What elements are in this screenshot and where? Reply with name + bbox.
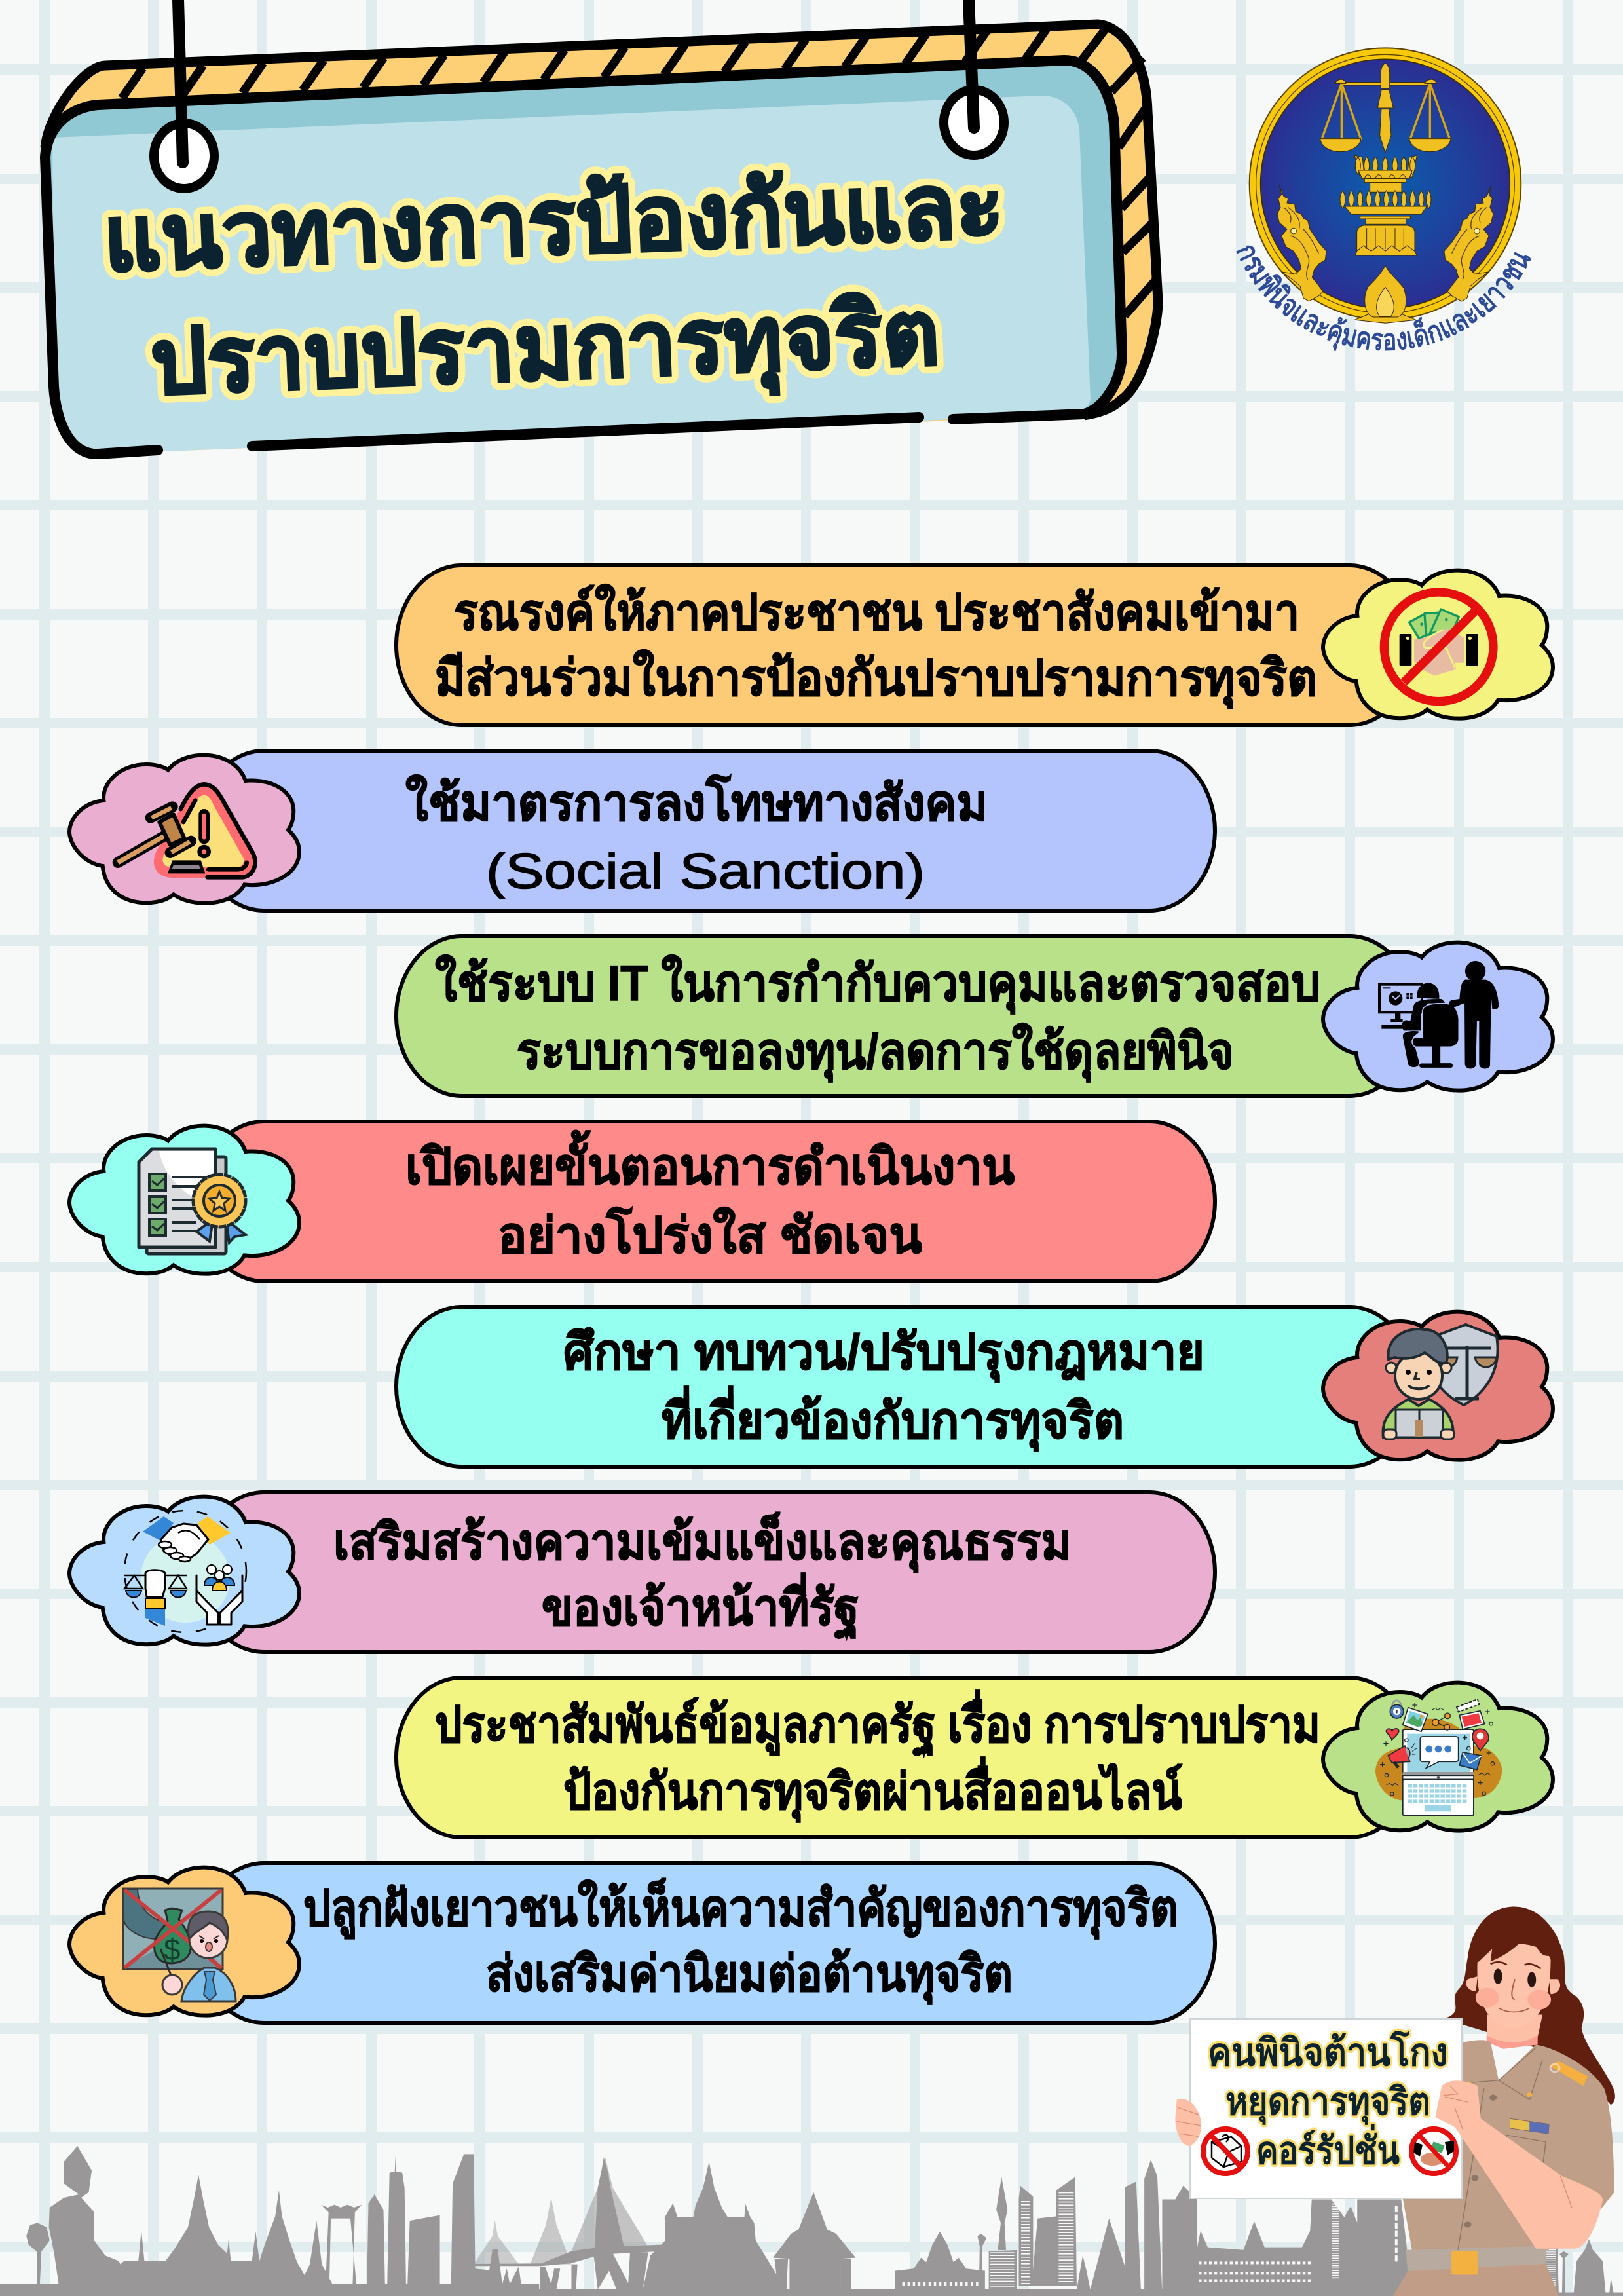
pill 8 text: ปลูกฝังเยาวชนให้เห็นความสำคัญของการทุจริต — [303, 1878, 1178, 1940]
sign text: คนพินิจต้านโกง — [1208, 2029, 1448, 2074]
icon: no bribery handshake — [1384, 592, 1493, 702]
icon: laptop and social media — [1375, 1699, 1502, 1816]
sign text: หยุดการทุจริต — [1225, 2080, 1430, 2126]
sign text — [1208, 2029, 1448, 2172]
hanging ring left — [154, 0, 214, 189]
title text: แนวทางการป้องกันและ — [102, 155, 1005, 290]
sign text: คอร์รัปชั่น — [1256, 2124, 1400, 2172]
pill 2 text: (Social Sanction) — [486, 844, 925, 899]
panel 2: social sanction — [69, 751, 1215, 911]
sign text: คนพินิจต้านโกง — [1208, 2029, 1448, 2074]
pill 2 — [198, 751, 1215, 911]
icon: checklist and seal — [139, 1149, 246, 1254]
panel 4: transparency — [69, 1121, 1215, 1281]
hanging ring right — [944, 0, 1004, 155]
pill 1 text: มีส่วนร่วมในการป้องกันปราบปรามการทุจริต — [435, 649, 1317, 709]
cloud 3 — [1323, 943, 1553, 1091]
icon: handshake, justice and people — [124, 1511, 246, 1632]
logo curved text: กรมพินิจและคุ้มครองเด็กและเยาวชน — [1236, 245, 1531, 351]
pill 5 text: ศึกษา ทบทวน/ปรับปรุงกฎหมาย — [563, 1325, 1204, 1383]
title text: ปราบปรามการทุจริต — [149, 282, 942, 419]
pill 7 text: ป้องกันการทุจริตผ่านสื่อออนไลน์ — [563, 1756, 1183, 1823]
pill 7 — [396, 1678, 1415, 1837]
pill 8 — [198, 1863, 1215, 2023]
panel 5: laws — [396, 1307, 1553, 1467]
cloud 1 — [1323, 571, 1553, 719]
panel 7: public relations — [396, 1678, 1553, 1837]
pill 4 — [198, 1121, 1215, 1281]
cloud 5 — [1323, 1312, 1553, 1460]
pill 7 text: ประชาสัมพันธ์ข้อมูลภาครัฐ เรื่อง การปราบปราม — [435, 1689, 1320, 1757]
cloud 7 — [1323, 1683, 1553, 1831]
icon: no bribe handshake — [1411, 2129, 1456, 2174]
sign text: หยุดการทุจริต — [1225, 2080, 1430, 2126]
pill 5 — [396, 1307, 1415, 1467]
character: woman in uniform — [1393, 1906, 1615, 2296]
pill 6 text: เสริมสร้างความเข้มแข็งและคุณธรรม — [333, 1512, 1072, 1573]
skyline silhouette — [0, 2146, 1623, 2296]
cloud 4 — [69, 1126, 299, 1274]
pill 6 text: ของเจ้าหน้าที่รัฐ — [542, 1572, 859, 1640]
sign text: คอร์รัปชั่น — [1256, 2124, 1400, 2172]
panel 1: campaign — [396, 565, 1553, 725]
pill 7 text — [435, 1689, 1320, 1823]
pill 3 — [396, 936, 1415, 1096]
icon: boy with book and justice shield — [1383, 1325, 1498, 1439]
cloud 8 — [69, 1868, 299, 2016]
pill 8 text — [303, 1878, 1178, 2005]
pill 3 text: ระบบการขอลงทุน/ลดการใช้ดุลยพินิจ — [517, 1023, 1234, 1083]
icon: no gift — [1203, 2129, 1248, 2174]
pill 4 text — [405, 1130, 1015, 1264]
title text: แนวทางการป้องกันและ — [102, 155, 1005, 290]
pill 1 text: รณรงค์ให้ภาคประชาชน ประชาสังคมเข้ามา — [454, 584, 1299, 641]
pill 4 text: เปิดเผยขั้นตอนการดำเนินงาน — [405, 1130, 1015, 1195]
protest sign — [1190, 2019, 1462, 2198]
pill 3 text — [435, 954, 1320, 1083]
pill 6 — [198, 1492, 1215, 1652]
pill 6 text — [333, 1512, 1072, 1640]
title text — [102, 155, 1005, 419]
pill 5 text: ที่เกี่ยวข้องกับการทุจริต — [662, 1385, 1124, 1452]
title sign board — [45, 0, 1158, 454]
pill 2 text: ใช้มาตรการลงโทษทางสังคม — [405, 774, 988, 831]
logo: department emblem — [1236, 47, 1531, 351]
title text: ปราบปรามการทุจริต — [149, 282, 942, 419]
pill 1 — [396, 565, 1415, 725]
pill 3 text: ใช้ระบบ IT ในการกำกับควบคุมและตรวจสอบ — [435, 954, 1320, 1015]
pill 2 text — [405, 774, 988, 899]
icon: anti-corruption teacher: $ — [164, 1932, 181, 1967]
panel 8: youth — [69, 1863, 1215, 2023]
panel 6: ethics — [69, 1492, 1215, 1652]
icon: anti-corruption teacher — [123, 1889, 236, 2001]
cloud 2 — [69, 755, 299, 903]
panel 3: IT systems — [396, 936, 1553, 1096]
pill 4 text: อย่างโปร่งใส ชัดเจน — [498, 1206, 922, 1264]
icon: staff at computer with supervisor — [1379, 961, 1499, 1068]
icon: gavel and warning — [118, 784, 257, 878]
pill 1 text — [435, 584, 1317, 709]
woman's arm and hands — [1175, 2080, 1603, 2249]
cloud 6 — [69, 1497, 299, 1645]
pill 5 text — [563, 1325, 1204, 1452]
pill 8 text: ส่งเสริมค่านิยมต่อต้านทุจริต — [486, 1946, 1013, 2005]
